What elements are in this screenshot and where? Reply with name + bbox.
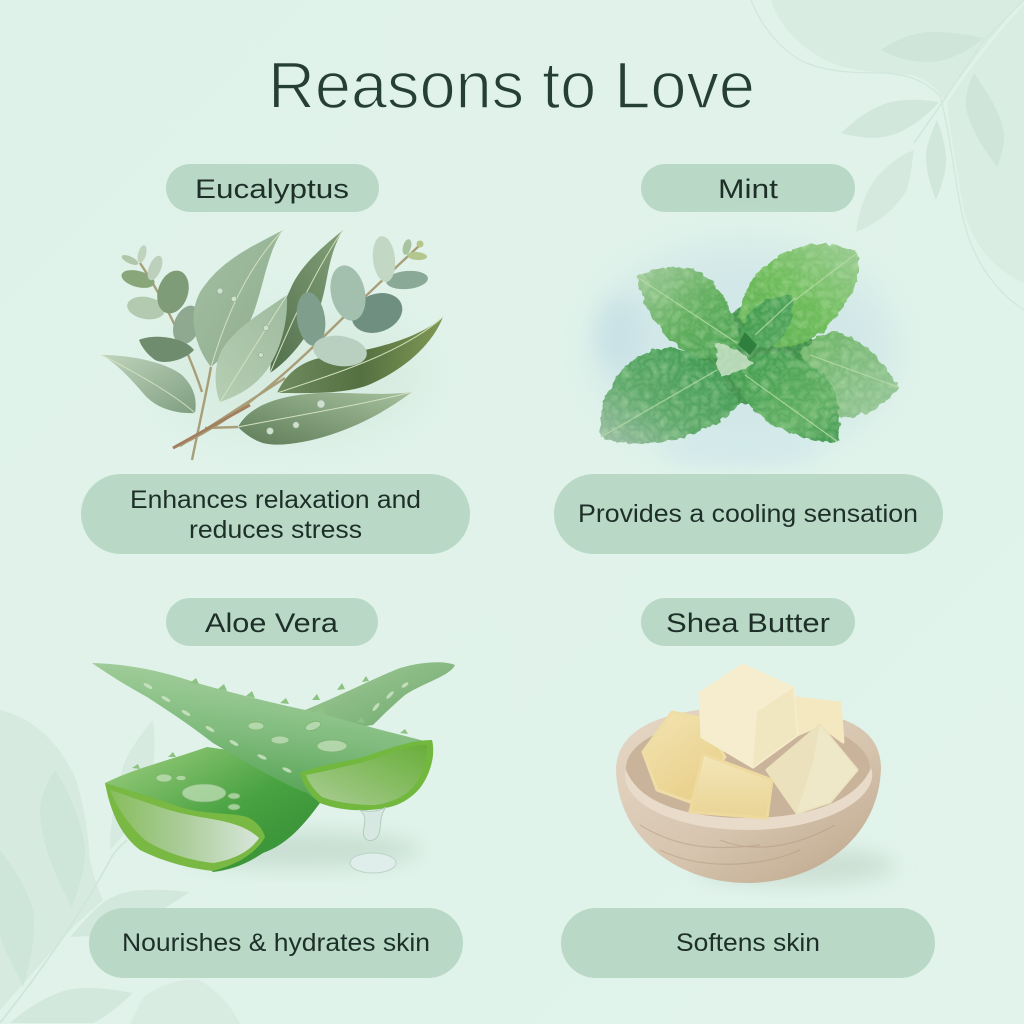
benefit pill: aloe vera: Nourishes & hydrates skin [122, 929, 430, 957]
butter cube: left [643, 712, 725, 802]
illustration: eucalyptus branch [102, 230, 443, 460]
panel: mint [554, 164, 943, 554]
benefit pill: eucalyptus: reduces stress [189, 516, 362, 544]
benefit pill: shea butter: Softens skin [676, 929, 820, 957]
butter cube: front [690, 754, 772, 818]
panel: aloe vera [89, 598, 463, 978]
name pill: aloe vera: Aloe Vera [205, 608, 339, 638]
droplet [360, 807, 386, 840]
puddle [350, 853, 396, 873]
name pill: eucalyptus [166, 164, 379, 212]
title: Reasons to Love [268, 48, 755, 122]
decorative foliage: top right [751, 0, 1024, 310]
butter cube: top [700, 665, 797, 767]
name pill: shea butter: Shea Butter [666, 608, 830, 638]
illustration: aloe vera leaves [92, 662, 455, 873]
panel: eucalyptus [81, 164, 470, 554]
name pill: mint: Mint [718, 174, 779, 204]
benefit pill: eucalyptus [81, 474, 470, 554]
name pill: shea butter [641, 598, 855, 646]
benefit pill: eucalyptus: Enhances relaxation and [130, 486, 421, 514]
benefit pill: mint [554, 474, 943, 554]
name pill: mint [641, 164, 855, 212]
butter cube: back right [797, 698, 843, 742]
illustration: bowl of shea butter [616, 665, 895, 884]
panel: shea butter [561, 598, 935, 978]
decorative foliage: bottom left [0, 710, 240, 1024]
butter cube: right [767, 725, 857, 813]
benefit pill: mint: Provides a cooling sensation [578, 500, 918, 528]
benefit pill: shea butter [561, 908, 935, 978]
illustration: mint sprig [595, 244, 898, 462]
name pill: aloe vera [166, 598, 378, 646]
name pill: eucalyptus: Eucalyptus [195, 174, 349, 204]
benefit pill: aloe vera [89, 908, 463, 978]
